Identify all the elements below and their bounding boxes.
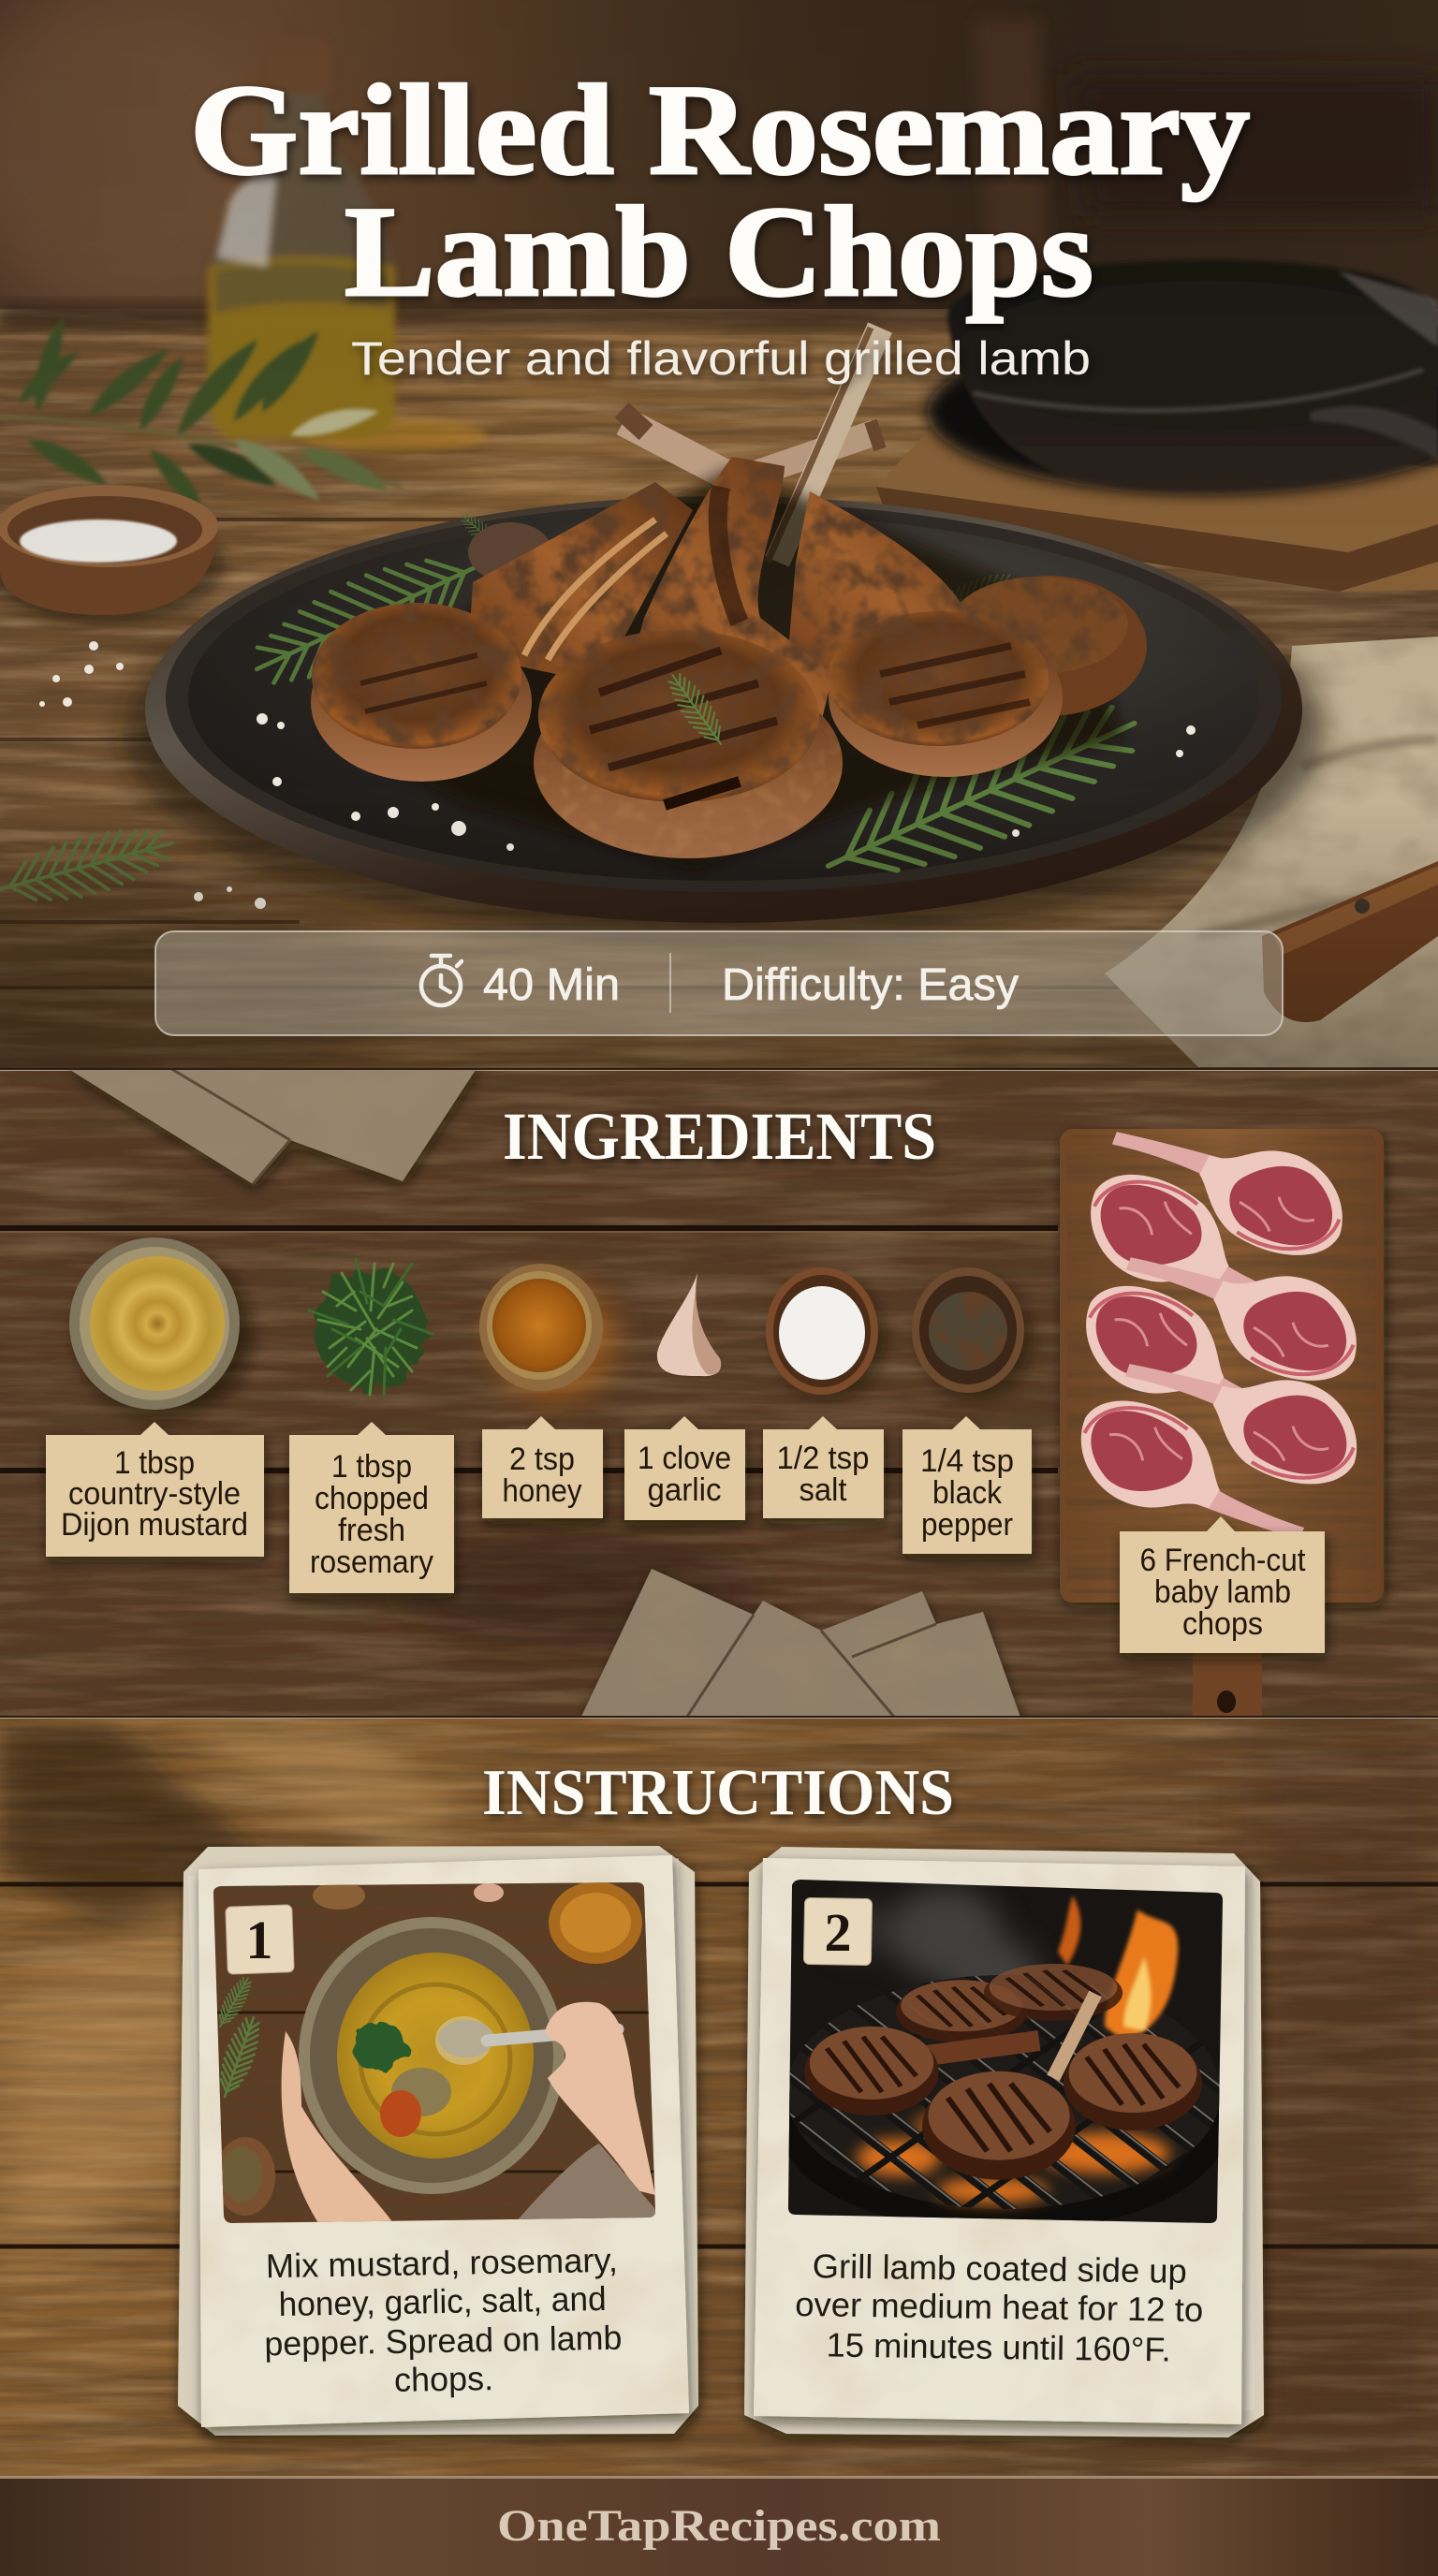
lamb chops bbox=[311, 328, 1147, 871]
label: honey: honey bbox=[502, 1473, 582, 1509]
ingredient: salt bowl bbox=[766, 1267, 886, 1400]
step badge 2 bbox=[803, 1897, 873, 1966]
ingredients panel bbox=[0, 1067, 1438, 1722]
step 1 text: chops. bbox=[394, 2359, 493, 2399]
ingredient: garlic clove bbox=[657, 1273, 721, 1376]
plate bbox=[125, 496, 1323, 945]
label: salt: 1/2 tsp bbox=[777, 1441, 869, 1476]
section heading: INSTRUCTIONS bbox=[482, 1757, 954, 1829]
ingredients wood background bbox=[0, 1068, 1438, 1719]
right hand bbox=[545, 2002, 655, 2195]
subtitle: Tender and flavorful grilled lamb bbox=[351, 332, 1091, 385]
left chop bbox=[311, 482, 693, 782]
sleeve bbox=[515, 2144, 655, 2228]
label: lamb chops bbox=[1120, 1516, 1325, 1653]
hero panel: plated lamb chops scene bbox=[0, 0, 1438, 1086]
instructions panel bbox=[0, 1716, 1438, 2479]
label: salt: salt bbox=[800, 1472, 847, 1508]
step badge 1 bbox=[226, 1905, 294, 1974]
wooden table bbox=[0, 301, 1438, 1086]
cutting board with raw chops bbox=[1060, 1117, 1384, 1722]
label: rosemary: chopped bbox=[315, 1481, 429, 1516]
label: lamb chops: 6 French-cut bbox=[1140, 1543, 1306, 1578]
salt crystals bbox=[39, 641, 1196, 909]
step 2 text: over medium heat for 12 to bbox=[795, 2285, 1203, 2329]
far chops bbox=[468, 522, 1147, 716]
label: pepper: pepper bbox=[921, 1507, 1013, 1543]
label: garlic bbox=[624, 1416, 745, 1520]
flame bbox=[1058, 1895, 1178, 2041]
footer bbox=[0, 2476, 1438, 2576]
label: pepper bbox=[902, 1416, 1032, 1554]
step 1 text: Mix mustard, rosemary, bbox=[266, 2241, 618, 2285]
knife handle bbox=[1262, 861, 1438, 1022]
label: garlic: garlic bbox=[648, 1472, 721, 1508]
napkin top left bbox=[66, 1067, 477, 1184]
grill bbox=[779, 1975, 1228, 2232]
label: mustard: 1 tbsp bbox=[114, 1445, 195, 1481]
right chop bbox=[786, 491, 1063, 777]
ingredient: honey dish bbox=[479, 1264, 616, 1402]
spoon bbox=[438, 2020, 618, 2057]
label: mustard: country-style bbox=[68, 1476, 241, 1512]
ingredient: mustard bowl bbox=[69, 1237, 253, 1420]
smoke bbox=[824, 1886, 1039, 2012]
label: mustard bbox=[46, 1422, 264, 1557]
step 1 card bbox=[178, 1846, 698, 2436]
label: garlic: 1 clove bbox=[638, 1441, 731, 1476]
label: honey bbox=[482, 1416, 603, 1518]
step 2 card bbox=[744, 1847, 1264, 2437]
title bbox=[190, 58, 1250, 323]
label: pepper: black bbox=[932, 1475, 1003, 1511]
label: lamb chops: chops bbox=[1182, 1606, 1263, 1642]
step badge 1: 1 bbox=[245, 1910, 273, 1970]
label: rosemary: 1 tbsp bbox=[331, 1449, 412, 1485]
label: honey: 2 tsp bbox=[509, 1442, 575, 1477]
spice bowl bbox=[215, 2137, 275, 2216]
label: mustard: Dijon mustard bbox=[61, 1507, 248, 1543]
grilled chops bbox=[804, 1964, 1202, 2180]
herbs beside bowl bbox=[212, 1973, 266, 2101]
front card bbox=[754, 1858, 1245, 2424]
olive branch bbox=[0, 315, 403, 520]
step 2 text: 15 minutes until 160°F. bbox=[826, 2325, 1171, 2369]
ingredient: pepper bowl bbox=[912, 1267, 1032, 1399]
section heading: INGREDIENTS bbox=[503, 1099, 936, 1174]
label: lamb chops: baby lamb bbox=[1154, 1574, 1291, 1610]
label: rosemary: rosemary bbox=[310, 1544, 433, 1580]
icon: stopwatch bbox=[421, 956, 462, 1005]
hero background wall bbox=[0, 0, 1438, 323]
front chop bbox=[534, 457, 843, 858]
rosemary sprig on table bbox=[0, 815, 179, 916]
step 1 photo bbox=[206, 1877, 665, 2232]
salt bowl bbox=[0, 485, 225, 624]
cast iron pan on board bbox=[876, 260, 1438, 592]
back sheets bbox=[744, 1847, 1264, 2437]
label: rosemary bbox=[289, 1422, 454, 1593]
step 2 text: Grill lamb coated side up bbox=[813, 2247, 1187, 2291]
olive oil bottle bbox=[208, 39, 487, 452]
label: salt bbox=[763, 1416, 884, 1518]
linen napkin bbox=[1105, 637, 1438, 1067]
napkin bottom centre bbox=[579, 1569, 1022, 1722]
title: Lamb Chops bbox=[345, 180, 1093, 323]
title: Grilled Rosemary bbox=[190, 58, 1250, 201]
difficulty label: Difficulty: Easy bbox=[722, 960, 1019, 1010]
step 1 text: honey, garlic, salt, and bbox=[278, 2279, 607, 2323]
front card bbox=[198, 1855, 689, 2427]
sprigs of rosemary on plate bbox=[241, 509, 1154, 909]
honey jar bbox=[549, 1881, 642, 1964]
label: rosemary: fresh bbox=[338, 1513, 405, 1548]
step 2 photo bbox=[779, 1877, 1231, 2232]
step badge 2: 2 bbox=[824, 1902, 852, 1963]
mixing bowl bbox=[299, 1917, 565, 2194]
instructions wood background bbox=[0, 1716, 1438, 2479]
time label: 40 Min bbox=[483, 960, 620, 1010]
ingredient: rosemary pile bbox=[309, 1259, 433, 1395]
step 1 text: pepper. Spread on lamb bbox=[264, 2319, 623, 2363]
bones bbox=[622, 328, 880, 562]
shadow under chops bbox=[318, 468, 1123, 871]
label: pepper: 1/4 tsp bbox=[920, 1443, 1014, 1479]
info bar bbox=[155, 931, 1283, 1035]
website: OneTapRecipes.com bbox=[497, 2501, 941, 2551]
top darkening bbox=[0, 0, 1438, 1068]
left hand bbox=[282, 2031, 393, 2223]
back sheets bbox=[178, 1846, 698, 2436]
